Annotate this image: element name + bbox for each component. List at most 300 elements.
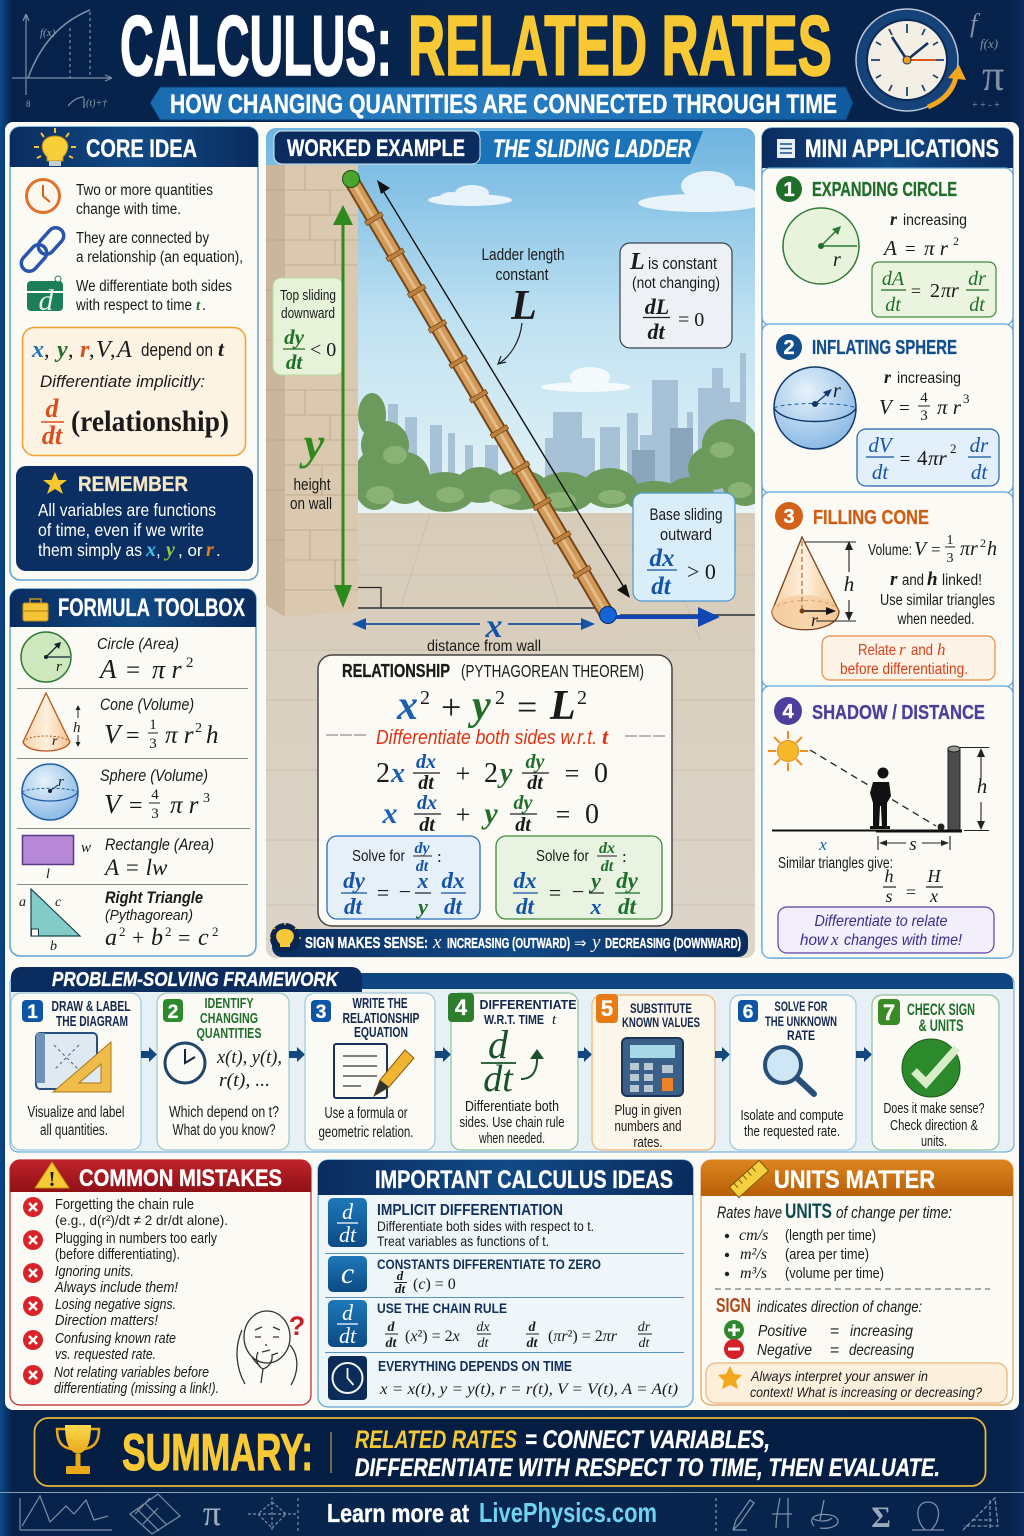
step 6: THE UNKNOWN bbox=[765, 1013, 837, 1029]
card: filling cone: linked! bbox=[942, 572, 982, 589]
equation: pythagorean: 2 bbox=[495, 687, 505, 709]
card: expanding circle: increasing bbox=[903, 212, 967, 229]
callout: implicit differentiation: , bbox=[110, 337, 116, 362]
callout: sign makes sense: y bbox=[590, 932, 601, 953]
callout: interpret in context: Always interpret your answer in bbox=[750, 1368, 928, 1384]
step 2 bbox=[157, 993, 289, 1150]
callout: L is constant: = 0 bbox=[678, 309, 704, 331]
box: solve for dx/dt: dt bbox=[601, 858, 614, 875]
panel: formula toolbox: FORMULA TOOLBOX bbox=[58, 594, 245, 622]
row: everything depends on time bbox=[328, 1356, 678, 1400]
row: constants bbox=[328, 1256, 601, 1296]
card: shadow distance: h bbox=[884, 866, 894, 886]
step 2: Which depend on t? bbox=[169, 1104, 279, 1121]
equation: derivative line one: 2 bbox=[376, 758, 390, 789]
arrow: step 4 to 5 bbox=[578, 1047, 592, 1062]
icon: confused face bbox=[237, 1311, 305, 1385]
panel: relationship bbox=[318, 655, 672, 926]
icon: derivative tile: d bbox=[38, 284, 54, 317]
mistake list: vs. requested rate. bbox=[55, 1347, 156, 1363]
dimension: x distance from wall bbox=[352, 608, 595, 655]
sign legend bbox=[724, 1320, 914, 1359]
box: solve for dx/dt: = bbox=[549, 880, 561, 905]
row: right triangle: c bbox=[198, 925, 209, 951]
sign legend: increasing bbox=[850, 1323, 913, 1340]
card: inflating sphere: 2 bbox=[950, 441, 956, 456]
row: everything depends on time: x = x(t), y = y(t), r = r(t), V = V(t), A = A(t) bbox=[379, 1381, 678, 1398]
step 5: SUBSTITUTE bbox=[630, 1001, 692, 1016]
card: expanding circle: πr bbox=[941, 280, 959, 302]
card: expanding circle: A bbox=[882, 236, 897, 260]
callout: sign makes sense: x bbox=[432, 932, 442, 953]
callout: remember: y bbox=[164, 539, 175, 561]
row: rectangle bbox=[22, 836, 214, 882]
list: unit examples: m²/s bbox=[740, 1246, 767, 1263]
icon: list bbox=[777, 139, 795, 158]
row: right triangle: b bbox=[151, 925, 163, 951]
card: filling cone: 3 bbox=[783, 506, 795, 528]
header graph decoration: f(x) bbox=[40, 27, 56, 39]
card: filling cone: FILLING CONE bbox=[813, 507, 929, 529]
callout: implicit differentiation: dt bbox=[42, 421, 63, 450]
icon: sun bbox=[768, 731, 808, 771]
equation: pythagorean: = bbox=[517, 687, 537, 727]
callout: implicit differentiation: t bbox=[218, 337, 225, 361]
step 5: rates. bbox=[634, 1134, 662, 1151]
card: inflating sphere: 4 bbox=[917, 446, 928, 470]
card: filling cone: Relate bbox=[858, 642, 896, 659]
equation: pythagorean: L bbox=[549, 683, 576, 729]
step 2: x(t), y(t), bbox=[216, 1047, 282, 1068]
card: expanding circle: = bbox=[911, 281, 921, 301]
row: circle: r bbox=[56, 659, 62, 675]
equation: derivative line two: x bbox=[382, 797, 398, 830]
text: rates have units: Rates have bbox=[717, 1203, 782, 1222]
callout: base sliding outward: > 0 bbox=[687, 559, 716, 584]
arrow: height y bbox=[333, 205, 353, 608]
panel: problem-solving framework bbox=[10, 967, 1014, 1152]
equation: derivative line one bbox=[376, 751, 608, 794]
box: solve for dy/dt: dx bbox=[442, 868, 464, 893]
callout: implicit differentiation bbox=[22, 328, 246, 456]
card: filling cone: r bbox=[811, 610, 819, 630]
card: inflating sphere: dV bbox=[868, 433, 894, 457]
row: right triangle: Right Triangle bbox=[105, 888, 203, 907]
card: filling cone: = bbox=[931, 540, 941, 559]
subtitle banner: HOW CHANGING QUANTITIES ARE CONNECTED THROUGH TIME bbox=[170, 89, 837, 119]
panel: core idea bbox=[10, 127, 258, 580]
row: cone: 3 bbox=[149, 736, 157, 752]
step 7: Check direction & bbox=[890, 1117, 978, 1134]
row: right triangle: 2 bbox=[212, 924, 218, 939]
card: filling cone: when needed. bbox=[897, 611, 974, 628]
step 6: the requested rate. bbox=[744, 1123, 840, 1140]
card: filling cone: h bbox=[987, 538, 997, 560]
step 4: sides. Use chain rule bbox=[460, 1115, 564, 1131]
row: implicit differentiation: Differentiate both sides with respect to t. bbox=[377, 1218, 594, 1234]
box: solve for dy/dt: dt bbox=[444, 894, 463, 919]
step 6: Isolate and compute bbox=[740, 1107, 844, 1124]
label: y height on wall bbox=[290, 418, 332, 513]
label: ladder length constant bbox=[482, 245, 564, 364]
step 6: 6 bbox=[743, 1002, 753, 1023]
step 5: Plug in given bbox=[614, 1102, 682, 1119]
card: filling cone: before differentiating. bbox=[840, 661, 968, 678]
sign legend: = bbox=[830, 1323, 839, 1340]
equation: pythagorean: 2 bbox=[577, 687, 587, 709]
row: sphere: π r bbox=[170, 792, 199, 819]
arrow: step 6 to 7 bbox=[856, 1047, 872, 1062]
box: solve for dx/dt: dx bbox=[599, 840, 615, 857]
card: expanding circle: 2 bbox=[953, 234, 959, 248]
row: right triangle: 2 bbox=[119, 924, 126, 939]
callout: remember: r bbox=[206, 539, 214, 561]
equation: derivative line two: y bbox=[481, 797, 498, 830]
row: constants: (c) = 0 bbox=[413, 1276, 456, 1293]
panel: formula toolbox bbox=[10, 589, 256, 956]
row: chain rule: dx bbox=[476, 1320, 490, 1335]
text: sign: SIGN bbox=[716, 1295, 751, 1317]
row: chain rule: d bbox=[388, 1320, 396, 1335]
step 4: W.R.T. TIME bbox=[484, 1012, 544, 1027]
callout: remember: x bbox=[145, 539, 156, 561]
step 2: IDENTIFY bbox=[204, 996, 254, 1012]
equation: derivative line two: dx bbox=[417, 792, 437, 814]
icon: warning triangle: ! bbox=[48, 1167, 56, 1191]
equation: pythagorean: x bbox=[396, 683, 418, 729]
heading: worked example bbox=[274, 131, 703, 164]
box: solve for dy/dt: dy bbox=[414, 840, 430, 857]
callout: L is constant: dL bbox=[645, 294, 669, 319]
row: right triangle: (Pythagorean) bbox=[105, 908, 193, 924]
card: expanding circle bbox=[762, 168, 1013, 325]
ladder bbox=[342, 173, 616, 620]
row: chain rule bbox=[328, 1300, 652, 1351]
row: right triangle: = bbox=[178, 925, 190, 950]
row: cone: Cone (Volume) bbox=[100, 696, 194, 714]
panel: units matter: UNITS MATTER bbox=[774, 1166, 935, 1194]
callout: base sliding outward: dx bbox=[650, 545, 674, 572]
row: sphere: = bbox=[129, 793, 143, 819]
text: rates have units bbox=[717, 1200, 952, 1223]
header graph decoration bbox=[12, 10, 112, 109]
row: right triangle bbox=[19, 888, 218, 954]
dimension: x distance from wall: distance from wall bbox=[427, 638, 541, 655]
mistake list: Not relating variables before bbox=[54, 1365, 209, 1381]
row: cone: = bbox=[126, 723, 140, 749]
box: solve for dy/dt: dt bbox=[416, 858, 429, 875]
text: rates have units: UNITS bbox=[785, 1200, 832, 1223]
card: filling cone: 1 bbox=[946, 533, 954, 548]
callout: sign makes sense: SIGN MAKES SENSE: bbox=[305, 935, 428, 952]
card: shadow distance: Similar triangles give: bbox=[778, 855, 893, 872]
box: solve for dy/dt bbox=[327, 836, 480, 919]
card: expanding circle: dt bbox=[969, 294, 985, 316]
callout: implicit differentiation: depend on bbox=[141, 340, 213, 360]
step 2: QUANTITIES bbox=[196, 1026, 262, 1042]
text: differentiate: . bbox=[202, 297, 206, 314]
text: differentiate both sides: Differentiate both sides w.r.t. bbox=[376, 727, 597, 749]
callout: top sliding downward: Top sliding bbox=[280, 287, 336, 304]
callout: L is constant: is constant bbox=[648, 255, 717, 273]
box: solve for dx/dt: dt bbox=[516, 894, 535, 919]
step 2: 2 bbox=[168, 1002, 178, 1023]
step 3: 3 bbox=[316, 1002, 326, 1023]
equation: derivative line one: 0 bbox=[594, 758, 608, 789]
equation: derivative line one: dt bbox=[418, 772, 435, 794]
box: solve for dx/dt: Solve for bbox=[536, 848, 590, 865]
card: filling cone: Use similar triangles bbox=[880, 592, 995, 609]
equation: pythagorean: 2 bbox=[420, 687, 430, 709]
step 1: THE DIAGRAM bbox=[56, 1013, 128, 1030]
panel: worked example scene bbox=[266, 128, 769, 958]
card: shadow distance: x bbox=[830, 930, 839, 949]
step 1: all quantities. bbox=[40, 1122, 108, 1139]
row: rectangle: w bbox=[81, 840, 91, 856]
row: chain rule: dr bbox=[638, 1320, 651, 1335]
row: right triangle: a bbox=[105, 925, 117, 951]
box: solve for dy/dt: : bbox=[437, 847, 442, 866]
row: sphere: 3 bbox=[151, 806, 159, 822]
panel: important calculus ideas bbox=[318, 1160, 693, 1407]
row: right triangle: a bbox=[19, 895, 26, 910]
step 6: SOLVE FOR bbox=[774, 998, 828, 1014]
card: expanding circle: 1 bbox=[783, 179, 795, 201]
icon: orange clock bbox=[26, 180, 60, 212]
card: filling cone: 3 bbox=[946, 551, 954, 566]
footer call to action: Learn more at bbox=[327, 1498, 469, 1528]
box: solve for dy/dt: − bbox=[399, 879, 411, 904]
callout: base sliding outward bbox=[633, 493, 735, 601]
sign legend: = bbox=[830, 1342, 839, 1359]
row: circle: A bbox=[98, 654, 117, 684]
row: sphere bbox=[22, 764, 210, 822]
card: shadow distance: x bbox=[818, 835, 827, 854]
callout: remember: , or bbox=[178, 541, 203, 560]
list: unit examples: cm/s bbox=[739, 1227, 768, 1244]
card: inflating sphere: 4 bbox=[920, 390, 928, 406]
card: inflating sphere: = bbox=[899, 398, 910, 419]
card: inflating sphere bbox=[762, 324, 1013, 493]
callout: implicit differentiation: d bbox=[46, 394, 60, 423]
box: solve for dx/dt: x bbox=[590, 894, 602, 919]
card: shadow distance: SHADOW / DISTANCE bbox=[812, 702, 985, 724]
step 2: CHANGING bbox=[200, 1011, 258, 1027]
card: inflating sphere: dt bbox=[872, 460, 889, 484]
row: everything depends on time: EVERYTHING DEPENDS ON TIME bbox=[378, 1358, 572, 1375]
row: sphere: Sphere (Volume) bbox=[100, 767, 208, 785]
equation: derivative line one: = bbox=[565, 759, 579, 788]
icon: ladder base ball bbox=[600, 606, 616, 624]
row: cone: h bbox=[73, 720, 80, 736]
card: inflating sphere: dt bbox=[971, 460, 988, 484]
callout: implicit differentiation: r bbox=[80, 337, 90, 363]
row: sphere: r bbox=[58, 774, 64, 790]
row: implicit differentiation: d bbox=[342, 1199, 354, 1224]
footer icons right bbox=[716, 1498, 998, 1532]
header math decoration: π bbox=[982, 51, 1004, 100]
card: shadow distance: Differentiate to relate bbox=[814, 913, 948, 930]
sign legend: Positive bbox=[758, 1323, 807, 1340]
callout: top sliding downward: dy bbox=[284, 325, 305, 349]
header math decoration: f bbox=[970, 9, 981, 38]
mistake list: Forgetting the chain rule bbox=[55, 1197, 194, 1213]
card: filling cone: V bbox=[914, 538, 929, 560]
callout: sign makes sense: DECREASING (DOWNWARD) bbox=[605, 935, 741, 952]
callout: L is constant: (not changing) bbox=[632, 275, 720, 292]
row: cone: 2 bbox=[195, 721, 202, 736]
text: quantities change: Two or more quantities bbox=[76, 182, 213, 199]
step 4: DIFFERENTIATE bbox=[480, 997, 577, 1012]
mistake list: Losing negative signs. bbox=[55, 1297, 176, 1313]
step 4: dt bbox=[483, 1058, 514, 1100]
step 4: Differentiate both bbox=[465, 1099, 559, 1115]
text: relationship: They are connected by bbox=[76, 230, 209, 247]
card: shadow distance: s bbox=[885, 886, 893, 906]
equation: derivative line two: = bbox=[556, 800, 570, 829]
mistake list: Direction matters! bbox=[55, 1313, 158, 1329]
callout: implicit differentiation: Differentiate implicitly: bbox=[40, 372, 205, 391]
box: solve for dx/dt: dt bbox=[618, 894, 637, 919]
panel: relationship: (PYTHAGOREAN THEOREM) bbox=[461, 661, 644, 681]
text: relationship bbox=[76, 230, 243, 266]
equation: derivative line two bbox=[382, 792, 599, 836]
step 5 bbox=[592, 994, 715, 1151]
title bbox=[120, 0, 832, 94]
box: solve for dy/dt: x bbox=[416, 868, 428, 893]
icon: derivative tile bbox=[27, 276, 63, 317]
card: inflating sphere: π r bbox=[937, 395, 962, 419]
equation: pythagorean: y bbox=[467, 683, 491, 729]
card: expanding circle: = bbox=[905, 239, 916, 260]
step 3: RELATIONSHIP bbox=[342, 1011, 420, 1027]
card: inflating sphere: V bbox=[879, 395, 894, 419]
callout: top sliding downward: dt bbox=[286, 350, 303, 374]
arrow: step 1 to 2 bbox=[141, 1047, 157, 1062]
callout: remember: . bbox=[216, 541, 221, 560]
step 4 bbox=[448, 993, 578, 1150]
row: cone: 1 bbox=[149, 717, 157, 733]
callout: implicit differentiation: A bbox=[115, 337, 132, 363]
step 6 bbox=[730, 995, 856, 1150]
equation: derivative line one: y bbox=[497, 758, 513, 789]
callout: implicit differentiation: x bbox=[31, 337, 44, 363]
callout: top sliding downward: < 0 bbox=[310, 339, 336, 361]
label: y height on wall: height bbox=[294, 476, 331, 494]
row: chain rule: dt bbox=[386, 1336, 398, 1351]
callout: interpret in context bbox=[706, 1363, 1007, 1403]
step 4: when needed. bbox=[478, 1131, 545, 1147]
card: inflating sphere: 3 bbox=[920, 408, 928, 424]
row: chain rule: d bbox=[342, 1300, 354, 1325]
row: implicit differentiation: dt bbox=[339, 1222, 357, 1247]
row: cone: V bbox=[104, 719, 124, 749]
text: quantities change: change with time. bbox=[76, 201, 181, 218]
footer call to action bbox=[327, 1497, 657, 1528]
card: filling cone: h bbox=[844, 572, 854, 596]
callout: L is constant: dt bbox=[647, 319, 665, 344]
callout: base sliding outward: Base sliding bbox=[650, 505, 722, 524]
card: expanding circle: dr bbox=[968, 268, 986, 290]
mistake list: differentiating (missing a link!). bbox=[54, 1381, 219, 1397]
card: shadow distance: 4 bbox=[782, 701, 794, 723]
list: unit examples: m³/s bbox=[740, 1265, 767, 1282]
card: inflating sphere: r bbox=[833, 380, 841, 402]
row: sphere: 3 bbox=[203, 791, 210, 806]
dimension: x distance from wall: x bbox=[484, 608, 502, 645]
row: cone: π r bbox=[165, 722, 194, 749]
row: right triangle: c bbox=[55, 895, 62, 910]
panel: units matter bbox=[701, 1160, 1013, 1405]
step 7: Does it make sense? bbox=[884, 1100, 984, 1117]
row: sphere: V bbox=[104, 789, 124, 819]
callout: remember bbox=[16, 466, 253, 571]
callout: implicit differentiation: V bbox=[96, 337, 113, 363]
step 5: 5 bbox=[601, 996, 613, 1021]
equation: derivative line one: 2 bbox=[484, 758, 498, 789]
step 7: CHECK SIGN bbox=[907, 1001, 975, 1019]
footer pi symbol: π bbox=[203, 1493, 221, 1533]
label: ladder length constant: Ladder length bbox=[482, 245, 564, 264]
row: circle: Circle (Area) bbox=[97, 636, 179, 653]
equation: pythagorean bbox=[396, 683, 587, 729]
card: shadow distance: s bbox=[909, 834, 917, 855]
box: solve for dx/dt: y bbox=[588, 868, 601, 893]
sign legend: Negative bbox=[757, 1342, 812, 1359]
card: expanding circle: r bbox=[833, 249, 841, 271]
header graph decoration: 8 bbox=[26, 99, 31, 109]
summary banner: = CONNECT VARIABLES, bbox=[525, 1426, 770, 1454]
card: expanding circle: π r bbox=[924, 236, 949, 260]
card: inflating sphere: πr bbox=[928, 446, 948, 470]
card: inflating sphere: dr bbox=[970, 433, 989, 457]
step 7: units. bbox=[921, 1133, 947, 1150]
card: shadow distance: x bbox=[929, 886, 938, 906]
card: filling cone: 2 bbox=[980, 536, 986, 550]
box: solve for dx/dt bbox=[496, 836, 662, 919]
row: cone bbox=[23, 693, 218, 752]
callout: top sliding downward bbox=[273, 278, 343, 375]
row: right triangle: 2 bbox=[165, 924, 172, 939]
list: unit examples: (area per time) bbox=[785, 1247, 869, 1263]
arrow: base outward bbox=[616, 607, 720, 627]
mistake list: Always include them! bbox=[54, 1280, 178, 1296]
callout: L is constant bbox=[620, 243, 732, 348]
step 3 bbox=[305, 993, 435, 1150]
icon: light bulb bbox=[34, 128, 76, 166]
step 3: EQUATION bbox=[354, 1025, 408, 1041]
panel: common mistakes: COMMON MISTAKES bbox=[79, 1165, 282, 1192]
card: expanding circle: dA bbox=[882, 268, 905, 290]
text: relationship: a relationship (an equation), bbox=[76, 249, 243, 266]
step 1: 1 bbox=[27, 1002, 38, 1023]
row: circle: 2 bbox=[186, 655, 194, 671]
callout: top sliding downward: downward bbox=[281, 305, 335, 322]
step 7 bbox=[872, 995, 999, 1150]
icon: chain link bbox=[18, 224, 67, 275]
footer sigma: Σ bbox=[871, 1501, 891, 1534]
callout: remember: All variables are functions bbox=[38, 500, 216, 520]
sign legend: decreasing bbox=[849, 1342, 914, 1359]
callout: sign makes sense: INCREASING (OUTWARD) bbox=[447, 935, 570, 952]
step 4: 4 bbox=[455, 995, 468, 1020]
header math decoration bbox=[970, 9, 1004, 111]
callout: implicit differentiation: , bbox=[68, 337, 74, 362]
summary banner: RELATED RATES bbox=[355, 1426, 517, 1454]
step 4: d bbox=[488, 1022, 509, 1067]
equation: derivative line two: dt bbox=[515, 814, 532, 836]
card: shadow distance: how bbox=[800, 932, 829, 949]
